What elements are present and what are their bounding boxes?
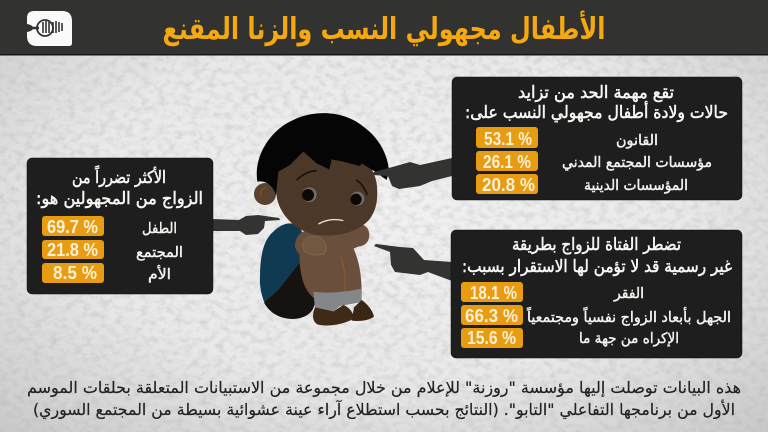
panel heading [462, 235, 732, 277]
row: child: الطفل [142, 221, 177, 237]
row: poverty [461, 282, 644, 303]
row: coercion: الإكراه من جهة ما [579, 331, 679, 347]
row: law: القانون [616, 133, 658, 149]
hand: upper right pointing [373, 158, 452, 189]
panel heading: غير رسمية قد لا تؤمن لها الاستقرار بسبب: [462, 257, 732, 277]
row: child [42, 216, 177, 237]
face [275, 148, 377, 236]
row: society: المجتمع [136, 245, 183, 261]
title: الأطفال مجهولي النسب والزنا المقنع [162, 10, 606, 47]
panel heading: حالات ولادة أطفال مجهولي النسب على: [465, 101, 728, 123]
row: religious [476, 174, 688, 195]
hand: lower right pointing [374, 244, 452, 281]
panel: most harmed [27, 158, 213, 294]
panel heading: الزواج من المجهولين هو: [36, 189, 203, 209]
panel heading [465, 83, 728, 123]
row: civil society [476, 151, 712, 172]
row: ignorance: الجهل بأبعاد الزواج نفسياً ومجتمعياً [526, 307, 731, 327]
logo [27, 11, 72, 46]
socks [313, 289, 362, 311]
row: poverty: 18.1 % [470, 283, 517, 303]
hand: left pointing [212, 215, 280, 235]
row: religious: 20.8 % [482, 175, 535, 195]
eyes [302, 187, 317, 202]
illustration: sad boy [254, 113, 389, 325]
shorts [264, 262, 315, 319]
panel: forced marriage [451, 230, 742, 358]
hair [257, 113, 389, 195]
row: coercion [461, 328, 679, 348]
panel heading [36, 164, 203, 209]
row: ignorance [461, 305, 731, 327]
row: ignorance: 66.3 % [465, 306, 518, 326]
eyebrows [297, 171, 317, 180]
mouth [318, 220, 343, 224]
panel: responsibility [452, 77, 742, 200]
row: civil society: مؤسسات المجتمع المدني [562, 155, 712, 171]
source note: الأول من برنامجها التفاعلي "التابو". (النتائج بحسب استطلاع آراء عينة عشوائية بسيطة من المجتمع السوري) [33, 399, 735, 420]
row: society [42, 240, 183, 261]
row: mother [42, 263, 171, 283]
row: religious: المؤسسات الدينية [584, 178, 688, 194]
row: law [476, 127, 658, 149]
panel heading: الأكثر تضرراً من [72, 164, 166, 188]
row: coercion: 15.6 % [467, 328, 516, 348]
row: law: 53.1 % [484, 129, 532, 149]
arms [295, 224, 369, 260]
row: civil society: 26.1 % [483, 152, 531, 172]
row: society: 21.8 % [47, 240, 98, 260]
row: poverty: الفقر [613, 286, 644, 302]
source note: هذه البيانات توصلت إليها مؤسسة "روزنة" للإعلام من خلال مجموعة من الاستبيانات المتعلقة بحلقات الموسم [27, 378, 741, 398]
source note [27, 378, 741, 420]
panel heading: تقع مهمة الحد من تزايد [518, 83, 674, 103]
shirt [260, 223, 305, 307]
header band [0, 0, 768, 56]
row: child: 69.7 % [47, 217, 98, 237]
row: mother: 8.5 % [53, 263, 97, 283]
shoes [313, 305, 354, 325]
row: mother: الأم [148, 265, 171, 283]
panel heading: تضطر الفتاة للزواج بطريقة [512, 235, 681, 255]
legs [299, 240, 362, 298]
ear [254, 183, 276, 205]
